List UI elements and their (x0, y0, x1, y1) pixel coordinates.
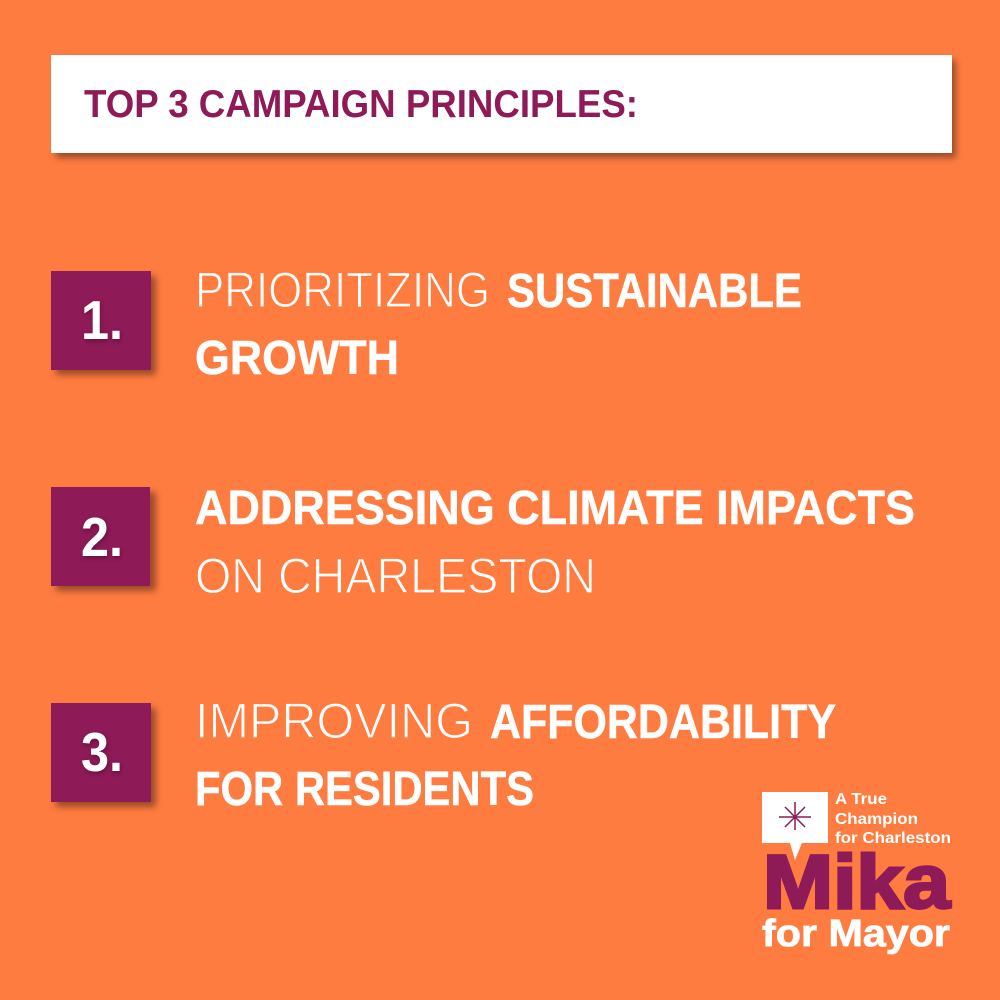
principle 1 text: PRIORITIZING (195, 262, 490, 318)
logo name Mika: Mika (763, 840, 951, 925)
header banner (51, 55, 956, 158)
logo for Mayor: for Mayor (762, 913, 950, 955)
number badge 1: 1. (81, 289, 123, 351)
principle 3 text: FOR RESIDENTS (195, 763, 534, 816)
principle 2 text: ON CHARLESTON (195, 548, 596, 604)
number badge 3 (51, 703, 156, 807)
principle 3 text: AFFORDABILITY (490, 696, 836, 749)
speech bubble (762, 792, 828, 860)
principle 3 text: IMPROVING (195, 693, 473, 749)
icon: asterisk star (779, 802, 811, 830)
heading: TOP 3 CAMPAIGN PRINCIPLES: (84, 83, 638, 126)
campaign logo (762, 791, 951, 955)
logo tagline (835, 791, 951, 847)
logo tagline: A True (835, 791, 887, 808)
number badge 2: 2. (81, 506, 123, 568)
principle 3 text (195, 693, 836, 816)
principle 1 text (195, 262, 802, 385)
principle 2 text: ADDRESSING CLIMATE IMPACTS (195, 482, 915, 535)
principle 1 text: SUSTAINABLE (507, 265, 802, 318)
principle 2 text (195, 482, 915, 604)
number badge 2 (51, 487, 156, 591)
principle 3 (51, 693, 836, 816)
principle 1 (51, 262, 802, 385)
principle 1 text: GROWTH (195, 332, 399, 385)
number badge 3: 3. (81, 721, 123, 783)
logo tagline: Champion (835, 811, 918, 828)
number badge 1 (51, 271, 156, 375)
logo tagline: for Charleston (835, 830, 951, 847)
principle 2 (51, 482, 915, 604)
